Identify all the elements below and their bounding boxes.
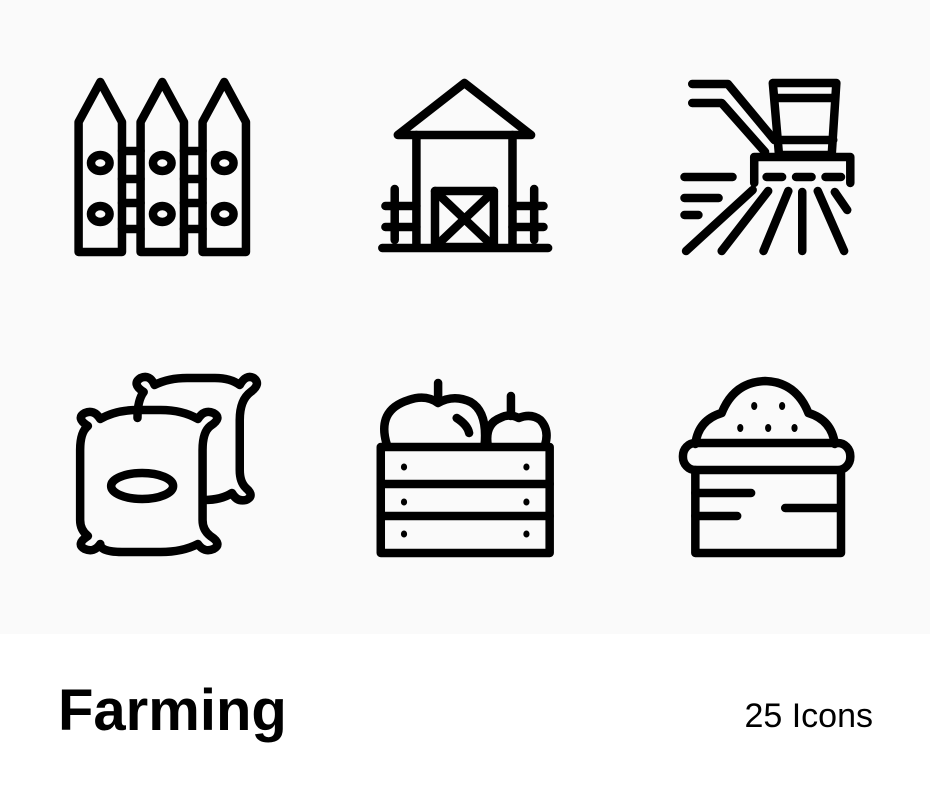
icon: fence bbox=[79, 82, 246, 252]
icon count label: 25 Icons bbox=[744, 697, 873, 735]
icon: fruit crate bbox=[381, 383, 550, 553]
icon: seeder bbox=[684, 83, 850, 251]
icon: barn bbox=[382, 83, 548, 248]
grain dots bbox=[737, 402, 798, 432]
crate dots bbox=[401, 464, 530, 538]
title: Farming bbox=[58, 678, 287, 743]
icon: grain bowl bbox=[683, 381, 850, 553]
icon: sacks bbox=[80, 377, 257, 552]
